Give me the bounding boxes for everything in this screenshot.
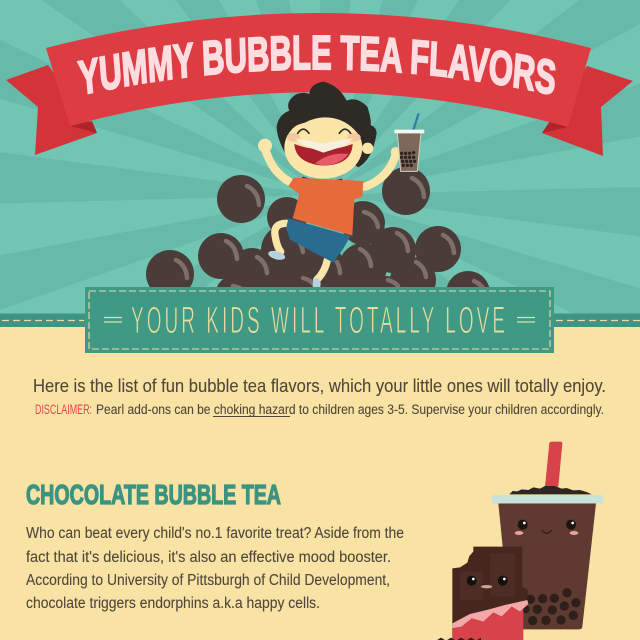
section paragraph: According to University of Pittsburgh of Child Development, xyxy=(26,572,390,589)
pearls in cup xyxy=(522,588,581,625)
orange shirt xyxy=(288,178,363,236)
hair xyxy=(277,82,377,167)
arms xyxy=(265,148,396,187)
collar xyxy=(302,177,343,183)
disclaimer: DISCLAIMER: xyxy=(35,402,92,417)
cup lid xyxy=(492,495,603,503)
shorts xyxy=(286,218,351,263)
bar face xyxy=(467,576,508,588)
section paragraph: Who can beat every child's no.1 favorite treat? Aside from the xyxy=(26,525,404,542)
teal sunburst background xyxy=(0,0,640,314)
shoes xyxy=(267,249,321,290)
left fist xyxy=(258,139,272,153)
cup face xyxy=(515,520,578,535)
green stitched stripe xyxy=(0,314,640,327)
open mouth xyxy=(294,144,353,166)
tongue xyxy=(315,154,348,166)
blush xyxy=(287,133,361,142)
red wrapper xyxy=(452,607,523,640)
face xyxy=(284,117,362,179)
section heading: CHOCOLATE BUBBLE TEA xyxy=(26,479,281,510)
bar segments xyxy=(460,553,515,600)
ribbon right tail xyxy=(542,66,633,156)
left dash ornament xyxy=(104,318,122,322)
ribbon main band xyxy=(46,13,591,127)
teeth xyxy=(295,138,353,153)
right hand xyxy=(391,147,401,157)
title: YUMMY BUBBLE TEA FLAVORS xyxy=(76,35,556,94)
bubble tea cup xyxy=(394,113,424,171)
right dash ornament xyxy=(517,318,535,322)
boy character holding bubble tea xyxy=(258,82,424,290)
ribbon left tail xyxy=(6,65,97,155)
chocolate cup and bar illustration xyxy=(436,442,603,640)
red straw xyxy=(545,442,562,487)
ear xyxy=(362,143,373,154)
section paragraph: chocolate triggers endorphins a.k.a happy cells. xyxy=(26,595,320,612)
legs xyxy=(275,223,327,280)
intro sentence: Here is the list of fun bubble tea flavors, which your little ones will totally enjoy. xyxy=(33,376,606,396)
hair fringe xyxy=(284,103,365,143)
subtitle text: YOUR KIDS WILL TOTALLY LOVE xyxy=(131,300,505,342)
pink wrapper edge xyxy=(452,600,528,628)
cup body xyxy=(498,503,596,629)
cookie topping xyxy=(509,486,592,494)
pile of tapioca pearls xyxy=(146,167,490,320)
wrapper pattern xyxy=(436,638,481,640)
section paragraph xyxy=(26,525,404,612)
subtitle banner xyxy=(85,287,554,353)
closed eyes xyxy=(298,129,351,133)
chocolate bar xyxy=(452,547,528,640)
section paragraph: fact that it's delicious, it's also an effective mood booster. xyxy=(26,549,391,566)
